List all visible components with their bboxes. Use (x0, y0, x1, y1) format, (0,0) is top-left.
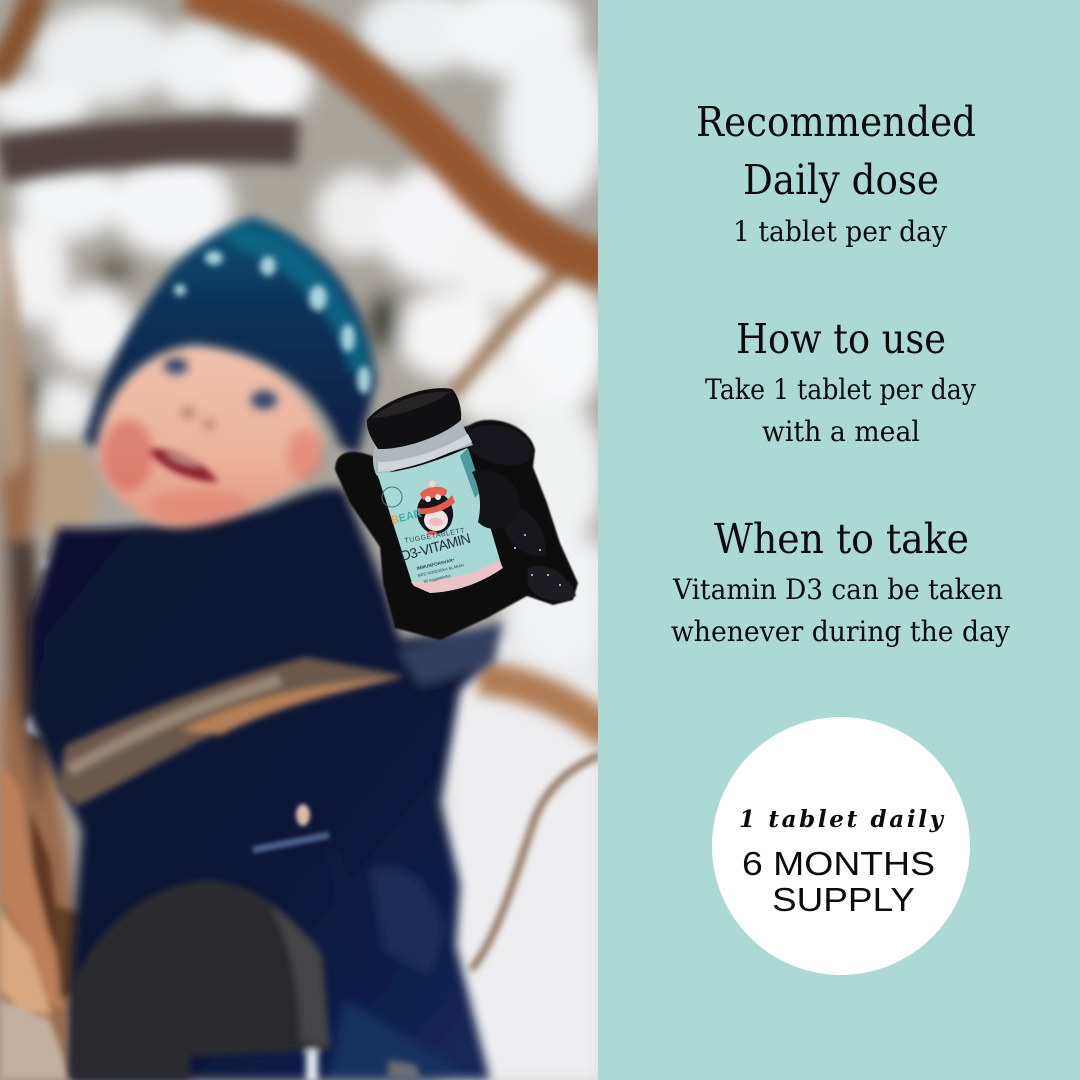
text block: how to use (705, 373, 976, 448)
grey trousers patch (70, 880, 422, 1080)
callout text: 6 months supply: SUPPLY (772, 881, 915, 918)
text block: how to use: with a meal (762, 415, 920, 448)
callout: 6 months supply badge (712, 717, 970, 975)
background branches (0, 0, 610, 735)
bottle label text: TUGGETABLETT (404, 527, 466, 545)
heading: Recommended Daily dose: Daily dose (743, 156, 939, 204)
heading: How to use: How to use (736, 315, 946, 363)
child facial features (164, 358, 277, 429)
blurred background bokeh (0, 0, 610, 1080)
snow flecks on glove (514, 534, 561, 586)
text block: when to take: Vitamin D3 can be taken (672, 573, 1003, 606)
jacket logo (253, 804, 329, 850)
panel: photo of child holding vitamin bottle (0, 0, 610, 1080)
text block: how to use: Take 1 tablet per day (705, 373, 976, 406)
callout text: 1 tablet daily: 1 tablet daily (739, 806, 945, 833)
bottle label text: 90 tuggtabletter (423, 573, 452, 584)
vitamin D3 bottle (367, 388, 520, 593)
bottle glass neck (373, 420, 473, 476)
heading: When to take: When to take (714, 515, 969, 563)
bottle label text: MED NORDISKA BLÅBÄR (417, 562, 465, 578)
heading: Recommended Daily dose: Recommended (696, 98, 976, 146)
bottle side panel (460, 448, 479, 498)
heading: Recommended Daily dose (696, 98, 976, 204)
bottle lid (367, 388, 461, 449)
panel: mint information column (598, 0, 1080, 1080)
text block: when to take (671, 573, 1010, 648)
child mouth (149, 449, 218, 482)
sleeve cuff band (398, 622, 502, 686)
callout text: 6 months supply (742, 845, 935, 918)
penguin mascot (416, 480, 455, 535)
foreground branch across body (57, 657, 406, 806)
child face (96, 344, 323, 528)
callout text: 6 months supply: 6 MONTHS (742, 845, 935, 882)
gummies visible at bottle base (411, 560, 503, 593)
child jacket (30, 488, 502, 1080)
bottle label text: D3-VITAMIN (399, 530, 472, 564)
bottle label text: IMMUNFÖRSVAR* (416, 556, 455, 571)
tree trunk on left (0, 200, 100, 1080)
bottle label (377, 448, 502, 592)
bark detail (0, 558, 85, 1080)
thin lower branch (471, 755, 600, 970)
finger overlapping label (472, 470, 520, 529)
text block: when to take: whenever during the day (671, 615, 1010, 648)
glove holding bottle (335, 420, 578, 640)
bottle label text (399, 527, 472, 584)
text block: daily dose: 1 tablet per day (733, 215, 947, 248)
brand name letters: BEAR (390, 508, 423, 527)
knit hat (85, 217, 376, 455)
brand logo circle (382, 487, 402, 507)
hat pattern dots (174, 251, 371, 394)
